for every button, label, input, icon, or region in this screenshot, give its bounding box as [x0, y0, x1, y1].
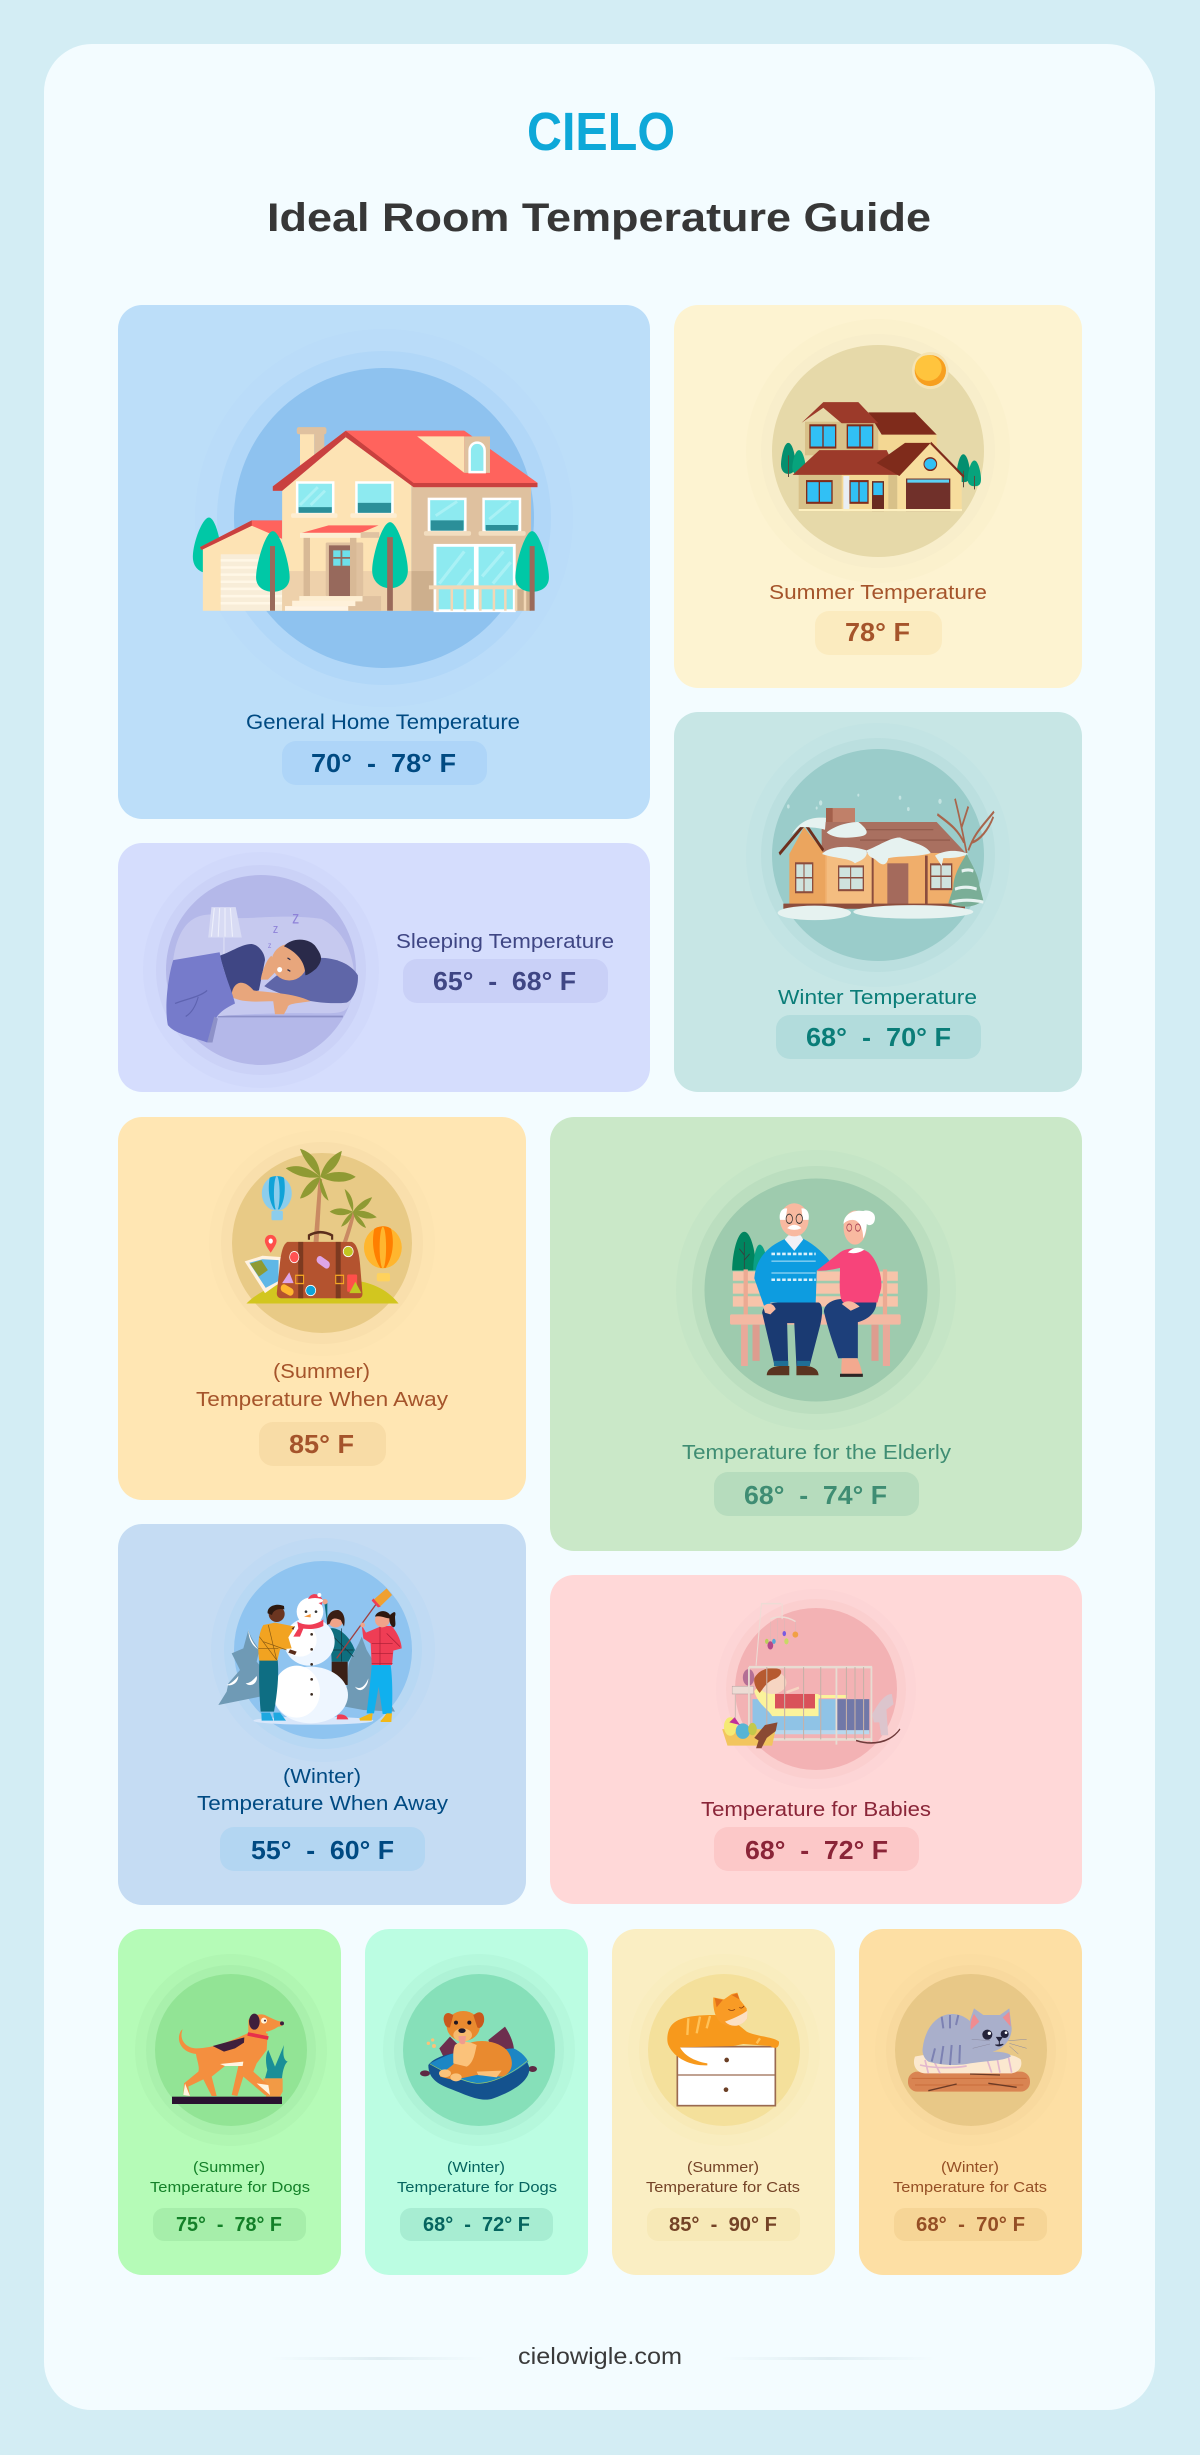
- label: Temperature for Dogs: [150, 2180, 310, 2196]
- label: Temperature for Cats: [646, 2180, 800, 2196]
- panel: winter dogs: [365, 1929, 588, 2275]
- panel: winter temperature when away: [118, 1524, 526, 1905]
- value pill: [259, 1422, 386, 1466]
- value pill: [815, 611, 942, 655]
- value pill: 68° - 74° F: [744, 1480, 887, 1510]
- value pill: [282, 741, 487, 785]
- footer url: cielowigle.com: [518, 2343, 682, 2369]
- panel: temperature for the elderly: [550, 1117, 1082, 1551]
- value pill: 85° - 90° F: [669, 2214, 777, 2236]
- panel: winter temperature: [674, 712, 1082, 1092]
- icon: people building snowman: [218, 1588, 402, 1725]
- value pill: [403, 959, 608, 1003]
- icon: sleeping man: z: [268, 940, 271, 950]
- value pill: [220, 1827, 425, 1871]
- label: Temperature for Cats: [893, 2180, 1047, 2196]
- value pill: 68° - 72° F: [745, 1835, 888, 1865]
- label: Temperature for Dogs: [397, 2180, 557, 2196]
- value pill: 68° - 70° F: [916, 2214, 1025, 2236]
- label: (Summer): [687, 2160, 759, 2176]
- value pill: 70° - 78° F: [311, 748, 456, 778]
- icon: grey cat on cushion: [908, 2008, 1030, 2092]
- label: [150, 2160, 310, 2196]
- icon: suitcase with palm trees and balloons: [245, 1149, 402, 1303]
- icon: suburban house with sun: [781, 352, 981, 511]
- icon: dog on bed: [420, 2011, 537, 2100]
- icon: snowy house: [778, 794, 994, 920]
- label: Temperature for Babies: [701, 1799, 931, 1821]
- panel: sleeping temperature: [118, 843, 650, 1092]
- label: Sleeping Temperature: [396, 931, 614, 953]
- value pill: [894, 2208, 1047, 2241]
- label: (Winter): [447, 2160, 505, 2176]
- label: Temperature When Away: [196, 1389, 448, 1411]
- value pill: 55° - 60° F: [251, 1835, 394, 1865]
- value pill: 85° F: [289, 1429, 354, 1459]
- value pill: 68° - 70° F: [806, 1022, 951, 1052]
- label: Summer Temperature: [769, 582, 987, 604]
- value pill: 75° - 78° F: [176, 2214, 282, 2236]
- label: [893, 2160, 1047, 2196]
- panel: general home temperature: [118, 305, 650, 819]
- value pill: 65° - 68° F: [433, 966, 576, 996]
- panel: summer cats: [612, 1929, 835, 2275]
- value pill: 78° F: [845, 617, 910, 647]
- label: (Summer): [193, 2160, 265, 2176]
- label: (Winter): [941, 2160, 999, 2176]
- panel: summer temperature when away: [118, 1117, 526, 1500]
- value pill: [400, 2208, 553, 2241]
- label: General Home Temperature: [246, 711, 520, 734]
- value pill: [714, 1827, 919, 1871]
- value pill: [776, 1015, 981, 1059]
- logo: Cielo: CIELO: [527, 102, 675, 162]
- icon: sleeping man: z: [292, 909, 299, 928]
- label: (Summer): [273, 1361, 370, 1383]
- icon: large house with red roof: [193, 427, 549, 611]
- label: [646, 2160, 800, 2196]
- label: Temperature for the Elderly: [682, 1442, 951, 1464]
- label: (Winter): [283, 1766, 361, 1788]
- panel: temperature for babies: [550, 1575, 1082, 1904]
- icon: baby in crib: [722, 1604, 900, 1748]
- panel: summer dogs: [118, 1929, 341, 2275]
- label: [197, 1766, 448, 1815]
- value pill: [714, 1472, 919, 1516]
- icon: sleeping man: [166, 907, 358, 1042]
- value pill: [153, 2208, 306, 2241]
- value pill: 68° - 72° F: [423, 2214, 530, 2236]
- label: [196, 1361, 448, 1411]
- label: Winter Temperature: [778, 987, 977, 1009]
- icon: elderly couple on bench: [730, 1203, 901, 1377]
- icon: sleeping man: z: [273, 921, 278, 936]
- panel: summer temperature: [674, 305, 1082, 688]
- panel: winter cats: [859, 1929, 1082, 2275]
- title: Ideal Room Temperature Guide: [267, 196, 931, 240]
- value pill: [647, 2208, 800, 2241]
- icon: orange cat on drawers: [667, 1993, 779, 2106]
- label: Temperature When Away: [197, 1793, 448, 1815]
- icon: standing dog: [172, 2014, 288, 2104]
- label: [397, 2160, 557, 2196]
